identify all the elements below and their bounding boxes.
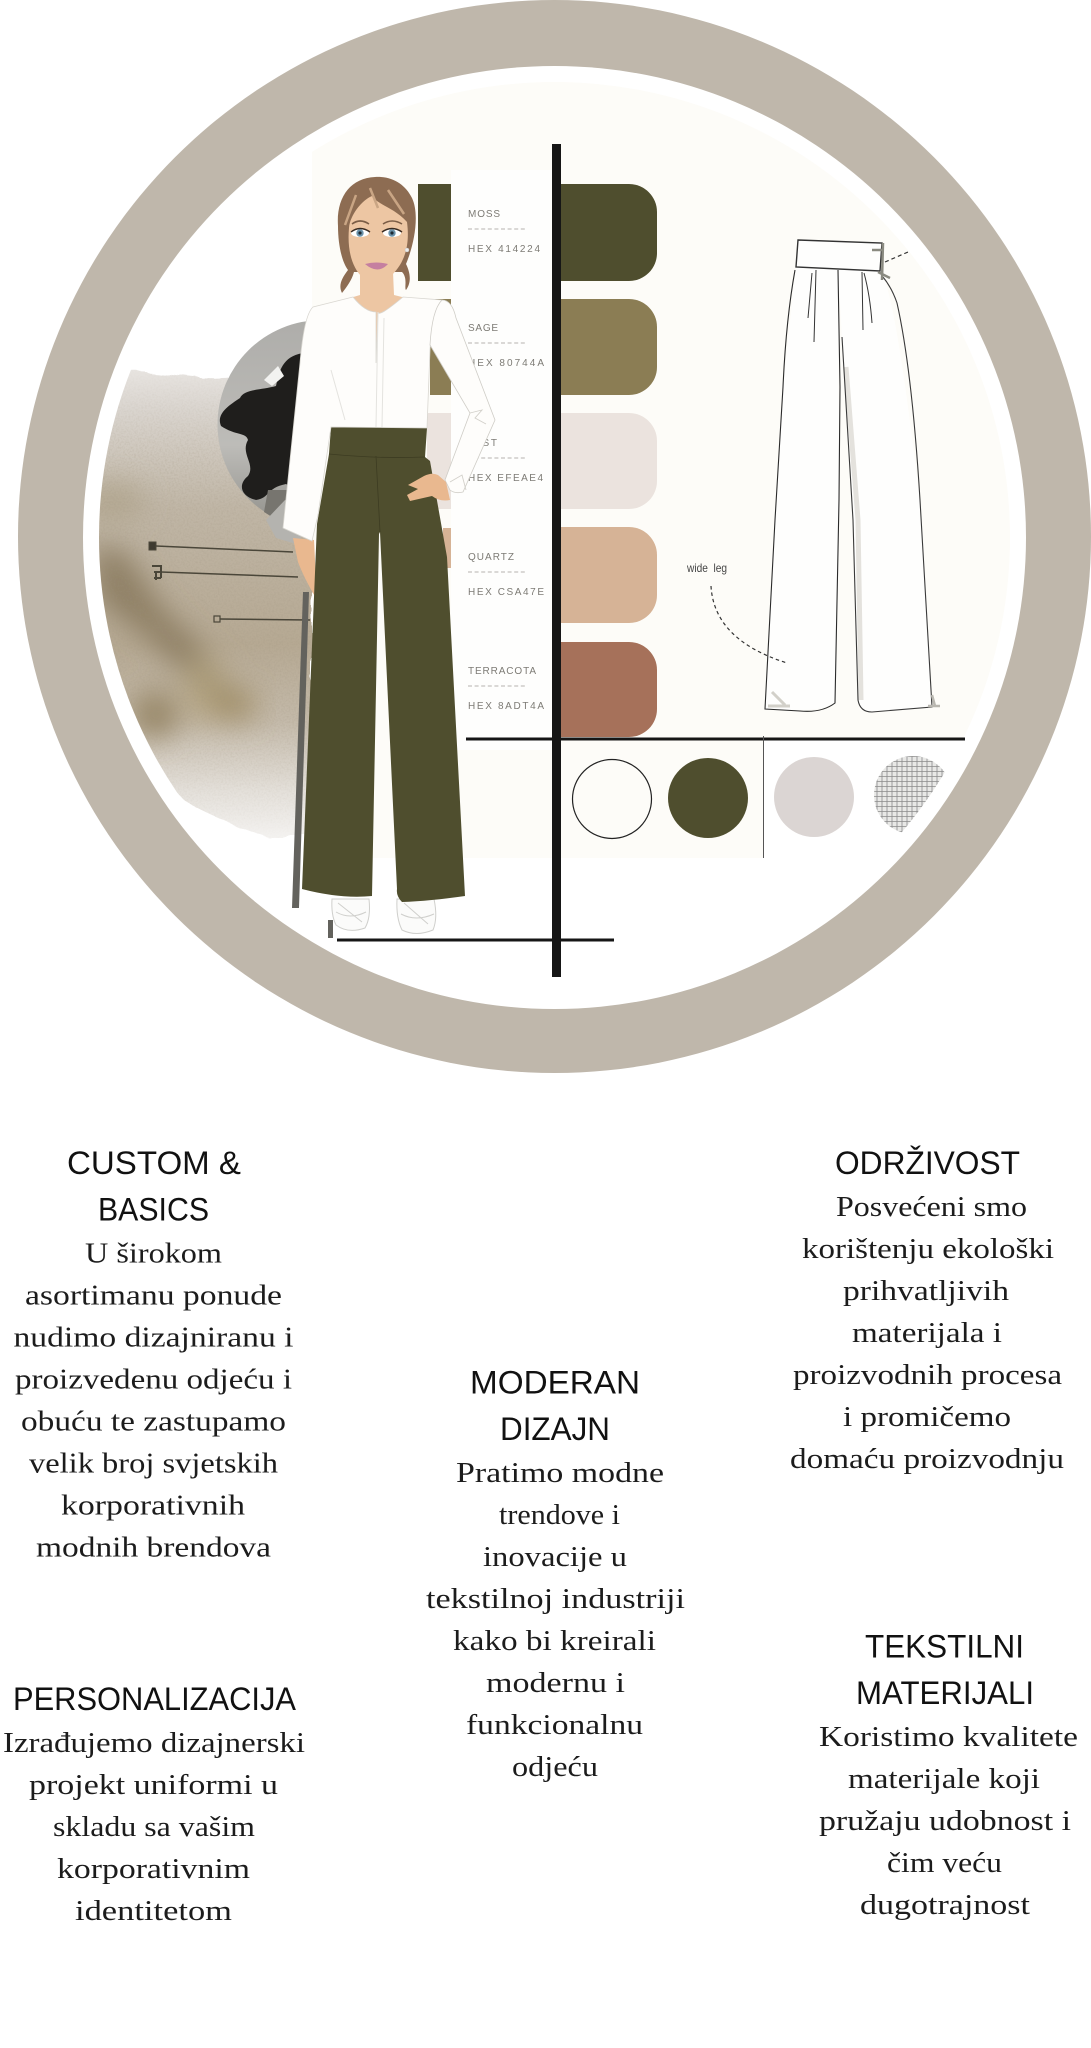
marker line 1 [149, 542, 293, 552]
body: obuću te zastupamo [21, 1406, 286, 1438]
label: quartz [468, 552, 544, 598]
heading: BASICS [98, 1192, 209, 1228]
cream moodboard area [312, 60, 1030, 858]
body: tekstilnoj industriji [426, 1583, 685, 1615]
heading: DIZAJN [500, 1411, 610, 1447]
body: projekt uniformi u [29, 1769, 278, 1801]
body: kako bi kreirali [453, 1625, 656, 1657]
lips [365, 262, 388, 270]
text block: odrzivost [790, 1145, 1064, 1475]
left hand [293, 538, 317, 600]
body: čim veću [887, 1847, 1002, 1879]
body [790, 1191, 1064, 1475]
heading: MATERIJALI [856, 1675, 1034, 1711]
colour labels [468, 209, 544, 712]
body: proizvedenu odjeću i [15, 1364, 292, 1396]
hair highlights [345, 188, 404, 225]
shirt placket [331, 312, 384, 427]
swatch: quartz [560, 527, 657, 623]
body: proizvodnih procesa [793, 1359, 1062, 1391]
swatch: sage [560, 299, 657, 395]
heading [67, 1145, 241, 1228]
text block: moderan dizajn [426, 1364, 685, 1783]
body: odjeću [512, 1751, 598, 1783]
swatch: terracota [560, 642, 657, 737]
circle: grey fabric [774, 757, 854, 837]
right sleeve [430, 300, 495, 493]
label: mist: HEX EFEAE4 [468, 473, 543, 484]
label: moss: MOSS [468, 209, 500, 220]
pole [292, 592, 333, 938]
label: sage: SAGE [468, 323, 498, 334]
label: terracota: HEX 8ADT4A [468, 701, 544, 712]
body: skladu sa vašim [53, 1811, 255, 1843]
body: velik broj svjetskih [29, 1448, 279, 1480]
body: Izrađujemo dizajnerski [3, 1727, 305, 1759]
body [819, 1721, 1078, 1921]
swatch: moss [560, 184, 657, 281]
circle: moss fabric [668, 758, 748, 838]
body: Pratimo modne [456, 1457, 664, 1489]
earring [405, 248, 409, 252]
body: materijala i [852, 1317, 1002, 1349]
swatch: mist [560, 413, 657, 509]
left colour strips [418, 184, 451, 568]
face [349, 196, 408, 283]
body: korporativnih [61, 1490, 246, 1522]
circle: woven texture [874, 756, 944, 832]
label: sage [468, 323, 544, 369]
neck [350, 272, 406, 362]
body: modernu i [486, 1667, 625, 1699]
heading: PERSONALIZACIJA [13, 1681, 297, 1717]
circle: white fabric [572, 760, 652, 838]
hair back [338, 177, 416, 293]
body [14, 1238, 294, 1564]
text block: custom and basics [14, 1145, 294, 1564]
body: i promičemo [843, 1401, 1011, 1433]
outer ring background [18, 0, 1091, 1073]
body: asortimanu ponude [25, 1280, 282, 1312]
body: korištenju ekološki [802, 1233, 1054, 1265]
body: modnih brendova [36, 1532, 271, 1564]
label: moss: HEX 414224 [468, 244, 540, 255]
body: funkcionalnu [466, 1709, 643, 1741]
text block: tekstilni materijali [819, 1628, 1078, 1921]
body: domaću proizvodnju [790, 1443, 1064, 1475]
body: prihvatljivih [843, 1275, 1010, 1307]
heading [856, 1628, 1034, 1711]
figure in wide-leg trousers [283, 177, 495, 938]
label: mist [468, 438, 543, 484]
body: dugotrajnost [860, 1889, 1030, 1921]
label: quartz: QUARTZ [468, 552, 514, 563]
label: sage: HEX 80744A [468, 358, 544, 369]
body [3, 1727, 305, 1927]
label: mist: MIST [468, 438, 497, 449]
body: pružaju udobnost i [819, 1805, 1071, 1837]
marker line 2 [152, 566, 298, 580]
body: inovacije u [483, 1541, 627, 1573]
shoes [332, 899, 436, 934]
heading: TEKSTILNI [865, 1628, 1024, 1664]
white label panel [451, 170, 552, 750]
wide leg note: wide leg [686, 561, 727, 575]
icon: flat sketch of wide-leg trousers [765, 240, 940, 712]
body: U širokom [85, 1238, 222, 1270]
label: moss [468, 209, 540, 255]
body: Posvećeni smo [836, 1191, 1027, 1223]
watercolor wash [99, 370, 312, 838]
colour swatches [560, 184, 657, 737]
ink circle [218, 321, 306, 543]
body: korporativnim [57, 1853, 251, 1885]
trousers [302, 427, 465, 902]
body: trendove i [499, 1499, 620, 1531]
eyes and brows [351, 221, 402, 237]
body: identitetom [75, 1895, 233, 1927]
heading: ODRŽIVOST [835, 1145, 1020, 1181]
heading [470, 1364, 640, 1447]
measurement markers [149, 542, 310, 622]
shirt [283, 297, 442, 541]
label: terracota: TERRACOTA [468, 666, 536, 677]
body: nudimo dizajniranu i [14, 1322, 294, 1354]
body [426, 1457, 685, 1783]
body: materijale koji [848, 1763, 1040, 1795]
right hand [407, 474, 450, 501]
marker line 3 [214, 616, 310, 622]
heading: CUSTOM & [67, 1145, 241, 1181]
body: Koristimo kvalitete [819, 1721, 1078, 1753]
label: terracota [468, 666, 544, 712]
text block: personalizacija [3, 1681, 305, 1927]
wide leg note [686, 561, 787, 663]
structural black lines [337, 144, 965, 977]
material circles [572, 756, 952, 838]
heading: MODERAN [470, 1364, 640, 1400]
label: quartz: HEX CSA47E [468, 587, 544, 598]
